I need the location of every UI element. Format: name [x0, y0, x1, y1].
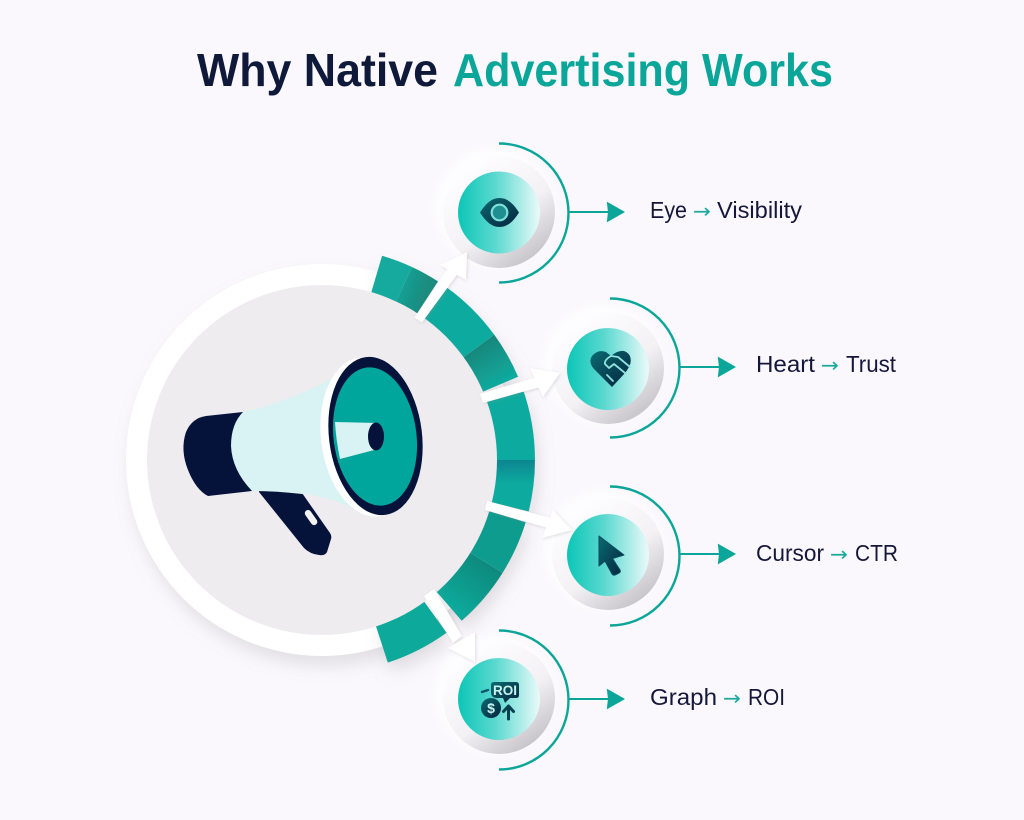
button disc [567, 328, 649, 410]
button ring [552, 498, 664, 610]
megaphone [183, 351, 431, 555]
icon: ROI money [481, 682, 519, 719]
white arrows from hub to items [415, 252, 572, 662]
white rim [312, 352, 426, 522]
title: Advertising Works [453, 44, 833, 96]
button glow [436, 636, 552, 752]
bracket arc [499, 630, 568, 770]
grey inner disc [147, 285, 497, 635]
item: cursor CTR [545, 486, 898, 626]
speaker hole [368, 422, 384, 450]
item: graph ROI [436, 630, 785, 770]
label: Visibility [717, 197, 803, 223]
item: heart trust [545, 298, 897, 438]
arrow to heart [480, 368, 560, 403]
button ring [552, 312, 664, 424]
label: → [693, 199, 711, 223]
title: Why Native [197, 44, 438, 96]
segmented teal arc [370, 256, 535, 663]
label: Cursor [756, 540, 824, 566]
label: → [723, 686, 741, 710]
handle slot [304, 509, 319, 526]
button disc [458, 658, 540, 740]
megaphone back [183, 412, 252, 496]
connector arrow [680, 546, 734, 562]
label: ROI [748, 684, 785, 710]
megaphone handle [259, 490, 331, 555]
connector arrow [569, 204, 623, 220]
bracket arc [610, 298, 680, 438]
icon: heart handshake [590, 351, 631, 387]
button glow [545, 306, 661, 422]
label: → [830, 542, 848, 566]
button ring [443, 642, 555, 754]
arrow to cursor [485, 501, 572, 538]
arrow to eye [415, 252, 467, 322]
item: eye visibility [436, 144, 803, 282]
label: Trust [846, 351, 897, 377]
button disc [458, 172, 540, 254]
label: → [821, 353, 839, 377]
button glow [545, 492, 661, 608]
icon: cursor [599, 536, 624, 575]
teal bell [325, 362, 425, 511]
icon: eye [480, 198, 519, 227]
bracket arc [499, 144, 568, 282]
inner beam [335, 422, 378, 459]
white outer ring [126, 264, 518, 656]
megaphone cone [231, 376, 362, 513]
label: Heart [756, 351, 816, 377]
connector arrow [680, 358, 734, 376]
central hub with megaphone [126, 256, 535, 663]
icon: ROI money: ROI [493, 682, 517, 698]
dark rim [320, 351, 431, 521]
label: Graph [650, 684, 717, 710]
icon: ROI money: $ [487, 700, 495, 716]
button ring [443, 156, 555, 268]
connector arrow [569, 690, 623, 708]
button glow [436, 149, 552, 265]
label: CTR [855, 540, 898, 566]
button disc [567, 514, 649, 596]
bracket arc [610, 486, 680, 626]
arrow to graph [424, 589, 475, 662]
label: Eye [650, 197, 687, 223]
